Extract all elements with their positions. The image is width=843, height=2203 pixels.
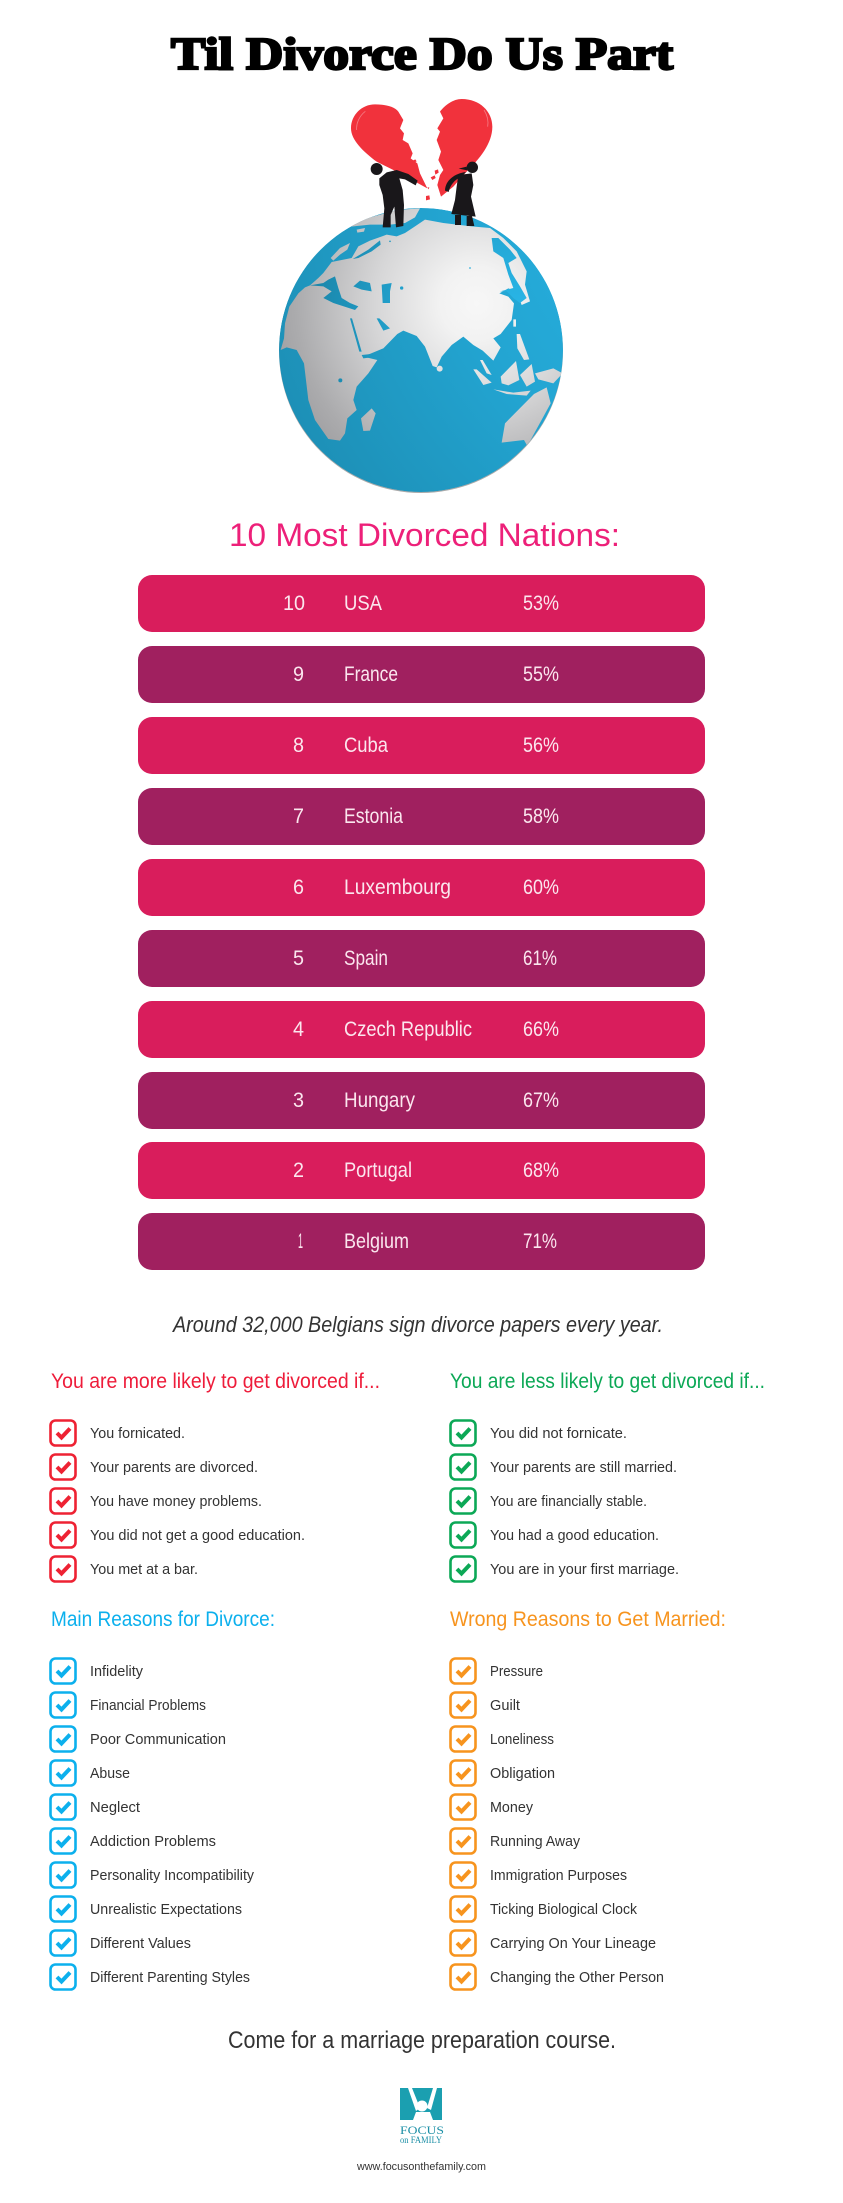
list: Different Values xyxy=(90,1936,191,1952)
row 4 Czech Republic: Czech Republic xyxy=(344,1018,472,1041)
right heart half xyxy=(437,99,492,197)
row 9 France: 55% xyxy=(523,663,559,686)
row 4 Czech Republic: 4 xyxy=(293,1018,304,1041)
row 1 Belgium: 1 xyxy=(298,1230,303,1253)
list: You have money problems. xyxy=(90,1494,262,1510)
row 7 Estonia: 58% xyxy=(523,805,559,828)
ranking table xyxy=(138,575,705,1270)
row 1 Belgium: 71% xyxy=(523,1230,557,1253)
row 6 Luxembourg xyxy=(138,859,705,916)
list: You did not get a good education. xyxy=(90,1528,305,1544)
row 2 Portugal: 2 xyxy=(293,1159,304,1182)
row 2 Portugal: 68% xyxy=(523,1159,559,1182)
call to action: Come for a marriage preparation course. xyxy=(228,2027,616,2054)
row 5 Spain: 61% xyxy=(523,947,557,970)
row 3 Hungary: 67% xyxy=(523,1089,559,1112)
list: Abuse xyxy=(90,1766,130,1782)
row 6 Luxembourg: Luxembourg xyxy=(344,876,451,899)
list: Personality Incompatibility xyxy=(90,1868,255,1884)
panel: wrong reasons to get married xyxy=(450,1608,726,1990)
panel: main reasons for divorce xyxy=(50,1608,275,1990)
illustration: couple tearing a heart apart xyxy=(351,99,492,227)
logo: Focus on the Family: on FAMILY xyxy=(400,2135,442,2145)
logo: Focus on the Family xyxy=(400,2088,444,2145)
row 6 Luxembourg: 60% xyxy=(523,876,559,899)
row 1 Belgium: Belgium xyxy=(344,1230,409,1253)
list xyxy=(450,1658,664,1990)
list: You fornicated. xyxy=(90,1426,185,1442)
list: Addiction Problems xyxy=(90,1834,216,1850)
list: Carrying On Your Lineage xyxy=(490,1936,656,1952)
title: Til Divorce Do Us Part xyxy=(171,28,674,79)
row 7 Estonia xyxy=(138,788,705,845)
list: Ticking Biological Clock xyxy=(490,1902,638,1918)
row 6 Luxembourg: 6 xyxy=(293,876,304,899)
list: Running Away xyxy=(490,1834,581,1850)
man silhouette xyxy=(371,163,418,227)
arctic land xyxy=(351,208,420,227)
row 3 Hungary: Hungary xyxy=(344,1089,415,1112)
list xyxy=(50,1658,255,1990)
list: You met at a bar. xyxy=(90,1562,198,1578)
row 5 Spain xyxy=(138,930,705,987)
panel: less likely to divorce xyxy=(450,1370,765,1582)
islands: UK, Iceland, Madagascar, Sri Lanka, SE Asia, Australia xyxy=(331,243,350,261)
list: Unrealistic Expectations xyxy=(90,1902,242,1918)
list xyxy=(450,1420,679,1582)
row 8 Cuba: 56% xyxy=(523,734,559,757)
row 8 Cuba xyxy=(138,717,705,774)
row 2 Portugal xyxy=(138,1142,705,1199)
row 2 Portugal: Portugal xyxy=(344,1159,412,1182)
statement: Belgians: Around 32,000 Belgians sign divorce papers every year. xyxy=(171,1312,663,1337)
row 1 Belgium xyxy=(138,1213,705,1270)
globe illustration xyxy=(279,208,563,493)
row 9 France: France xyxy=(344,663,398,686)
list: You are financially stable. xyxy=(490,1494,647,1510)
list: You are in your first marriage. xyxy=(490,1562,679,1578)
list: Neglect xyxy=(90,1800,140,1816)
left heart half xyxy=(351,104,427,188)
row 4 Czech Republic xyxy=(138,1001,705,1058)
landmass: Eurasia and Africa xyxy=(281,220,530,441)
row 4 Czech Republic: 66% xyxy=(523,1018,559,1041)
row 9 France: 9 xyxy=(293,663,304,686)
list: Guilt xyxy=(490,1698,520,1714)
list: Your parents are still married. xyxy=(490,1460,677,1476)
row 3 Hungary: 3 xyxy=(293,1089,304,1112)
list: You did not fornicate. xyxy=(490,1426,627,1442)
inland seas xyxy=(310,276,358,310)
list: Immigration Purposes xyxy=(490,1868,627,1884)
woman silhouette xyxy=(445,162,478,226)
list: You had a good education. xyxy=(490,1528,659,1544)
logo: Focus on the Family: FOCUS xyxy=(400,2123,444,2137)
row 10 USA: USA xyxy=(344,592,382,615)
heart crumbs xyxy=(413,159,439,200)
list: Changing the Other Person xyxy=(490,1970,664,1986)
heading: Main Reasons for Divorce: xyxy=(51,1608,275,1631)
list: Money xyxy=(490,1800,534,1816)
row 10 USA: 53% xyxy=(523,592,559,615)
list: Loneliness xyxy=(490,1732,554,1748)
row 3 Hungary xyxy=(138,1072,705,1129)
heading: 10 most divorced nations: 10 Most Divorced Nations: xyxy=(229,517,620,553)
panel: more likely to divorce xyxy=(50,1370,380,1582)
heading: You are less likely to get divorced if... xyxy=(450,1370,765,1393)
list: Your parents are divorced. xyxy=(90,1460,258,1476)
row 10 USA xyxy=(138,575,705,632)
list: Infidelity xyxy=(90,1664,144,1680)
heading: Wrong Reasons to Get Married: xyxy=(450,1608,726,1631)
list: Different Parenting Styles xyxy=(90,1970,250,1986)
row 8 Cuba: 8 xyxy=(293,734,304,757)
list: Poor Communication xyxy=(90,1732,226,1748)
row 7 Estonia: 7 xyxy=(293,805,304,828)
list: Pressure xyxy=(490,1664,543,1680)
list xyxy=(50,1420,305,1582)
list: Obligation xyxy=(490,1766,555,1782)
row 7 Estonia: Estonia xyxy=(344,805,403,828)
list: Financial Problems xyxy=(90,1698,206,1714)
row 10 USA: 10 xyxy=(283,592,305,615)
row 8 Cuba: Cuba xyxy=(344,734,388,757)
row 5 Spain: Spain xyxy=(344,947,388,970)
row 5 Spain: 5 xyxy=(293,947,304,970)
website url: www.focusonthefamily.com xyxy=(356,2161,486,2173)
row 9 France xyxy=(138,646,705,703)
heading: You are more likely to get divorced if... xyxy=(51,1370,380,1393)
